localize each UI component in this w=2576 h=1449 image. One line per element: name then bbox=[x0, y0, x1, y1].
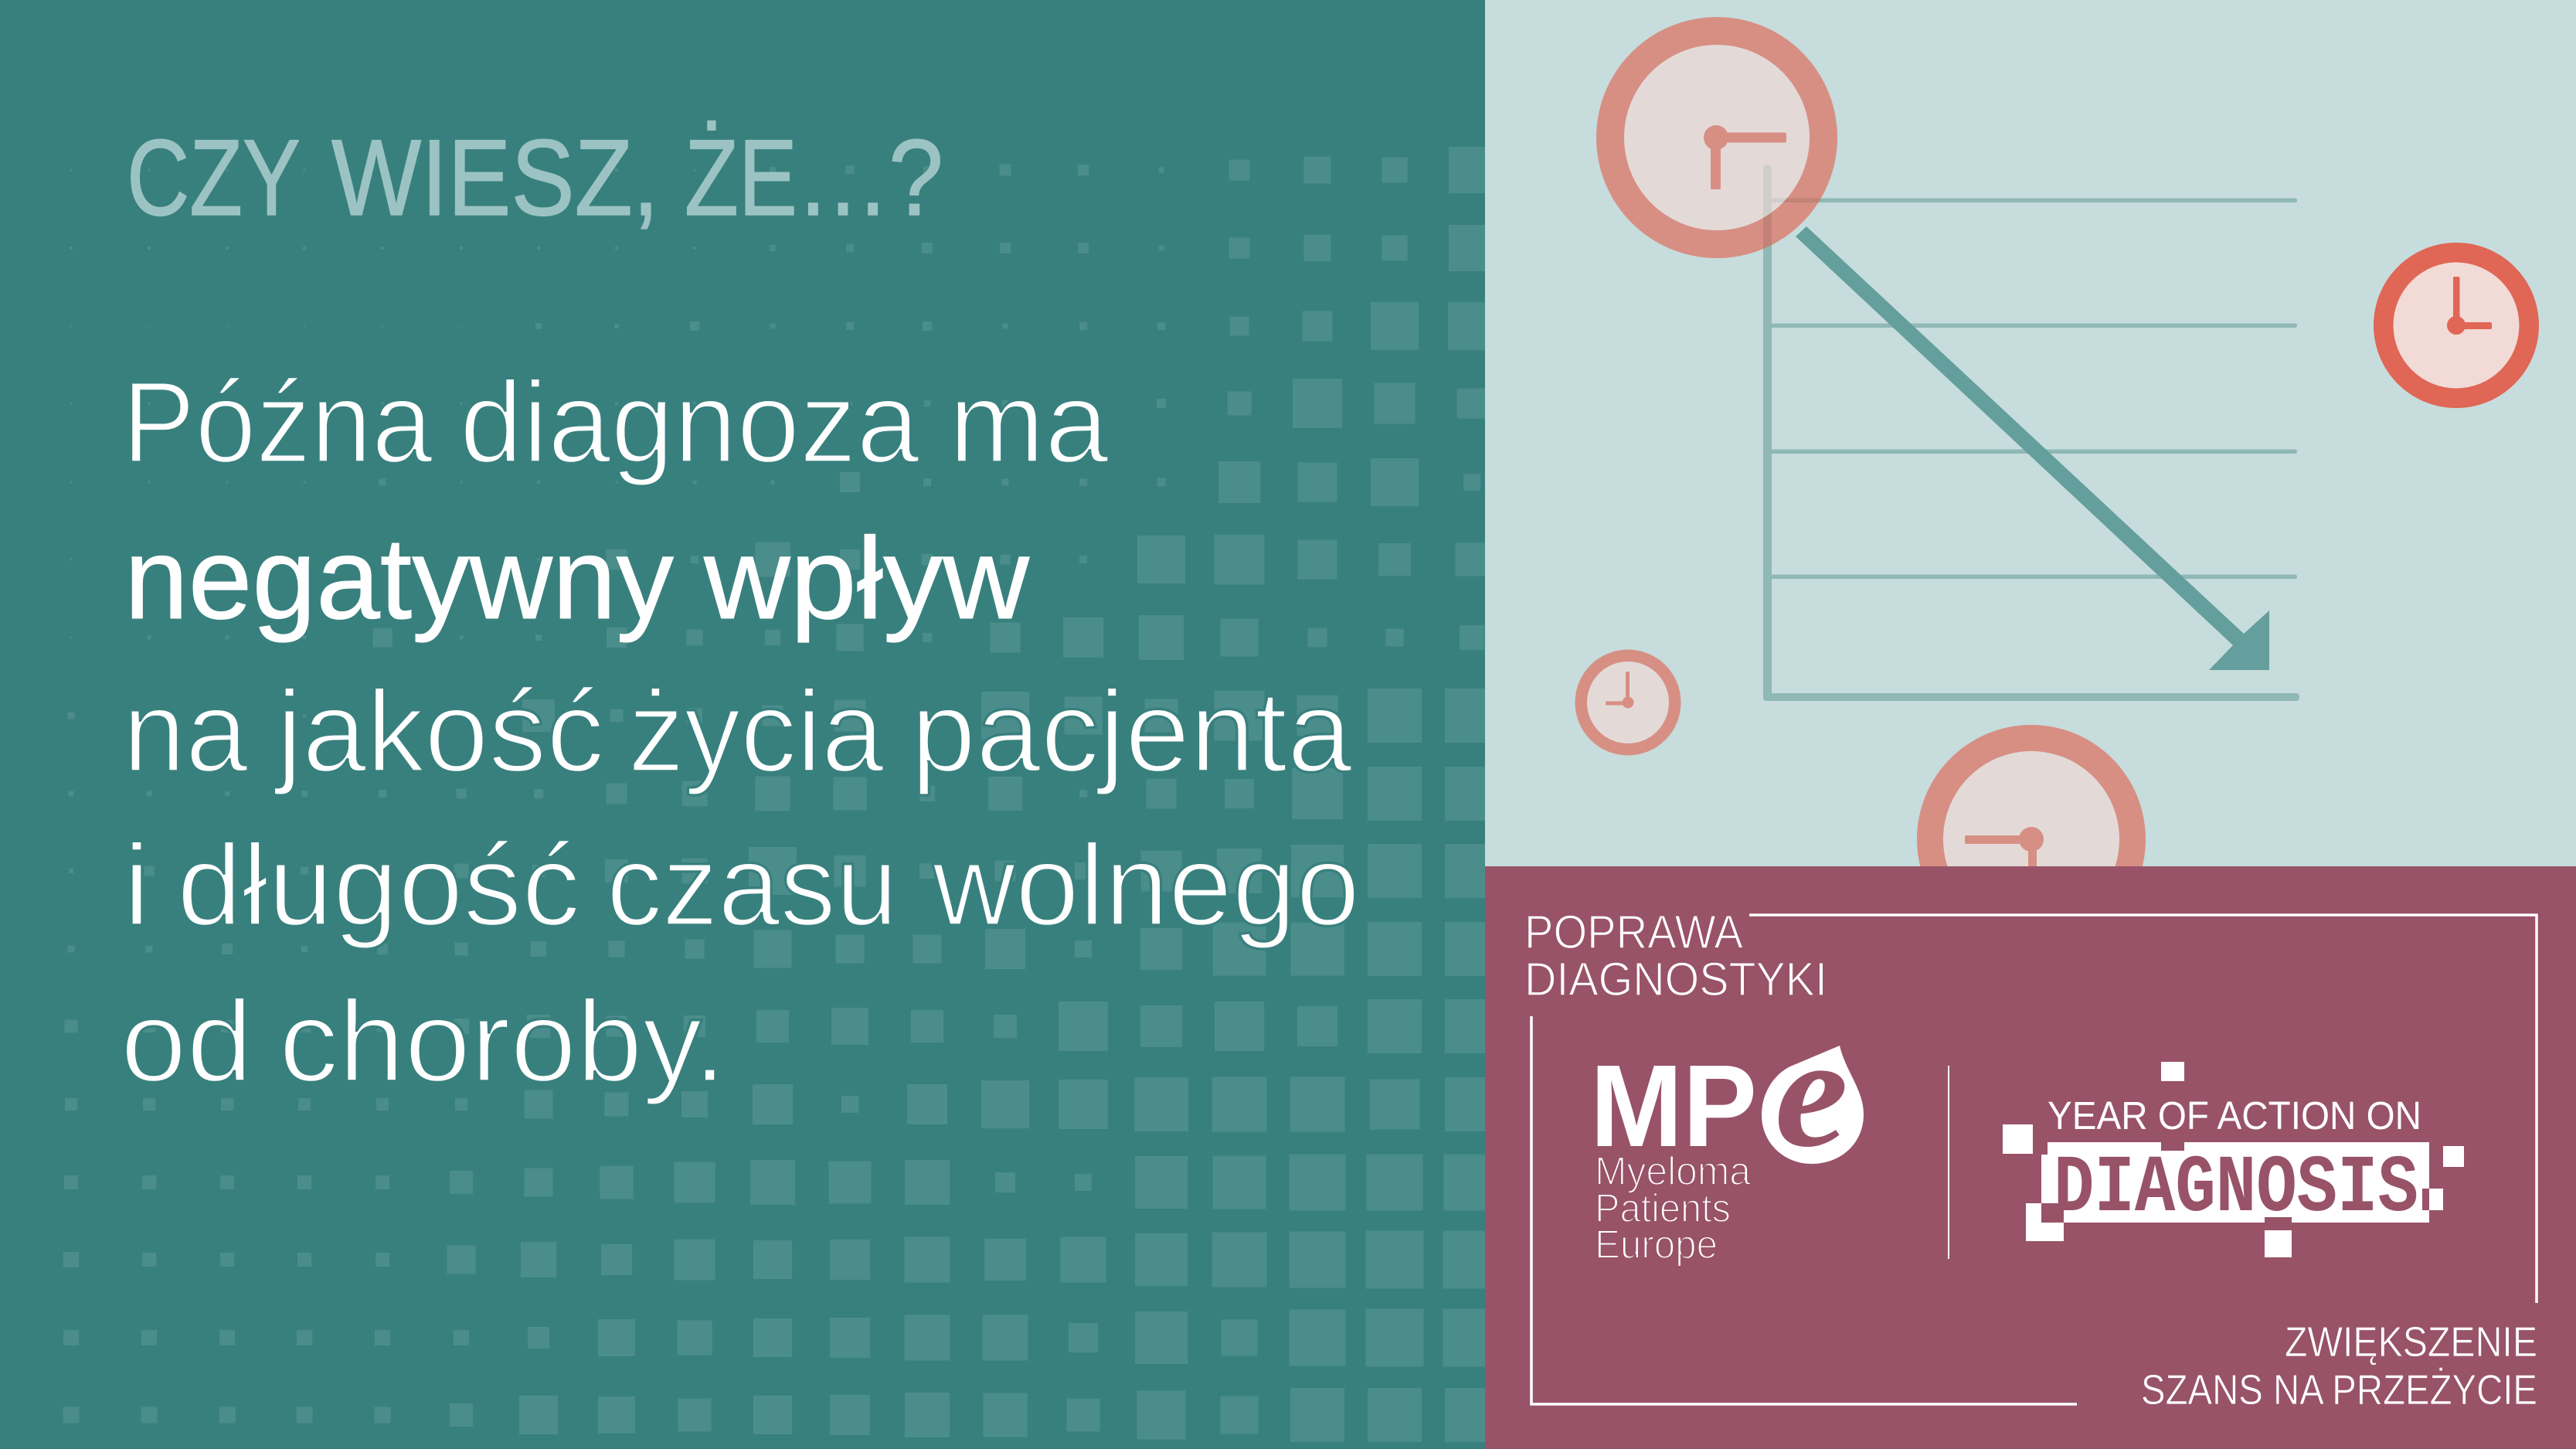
icon: small clock left bbox=[1575, 649, 1681, 756]
logo name: Myeloma bbox=[1595, 1149, 1751, 1194]
line: na jakość życia pacjenta: na bbox=[123, 666, 249, 796]
line: na jakość życia pacjenta: życia bbox=[628, 666, 885, 796]
line: od choroby.: od bbox=[121, 976, 253, 1106]
line: Późna diagnoza ma bbox=[122, 357, 1110, 487]
logo: Myeloma Patients Europe bbox=[1590, 1005, 1864, 1267]
divider bbox=[1948, 1066, 1949, 1259]
line: i długość czasu wolnego: długość bbox=[177, 820, 580, 950]
line: na jakość życia pacjenta: jakość bbox=[274, 666, 604, 796]
icon: drop with letter e: e bbox=[1775, 1005, 1848, 1180]
line: negatywny wpływ (emphasis) bbox=[124, 513, 1030, 643]
label: ZWIĘKSZENIE SZANS NA PRZEŻYCIE: ZWIĘKSZENIE bbox=[2285, 1318, 2537, 1366]
line: na jakość życia pacjenta bbox=[123, 666, 1353, 796]
logo text: YEAR OF ACTION ON: YEAR OF ACTION ON bbox=[2048, 1094, 2421, 1138]
line: i długość czasu wolnego: wolnego bbox=[932, 820, 1360, 950]
label: POPRAWA DIAGNOSTYKI: DIAGNOSTYKI bbox=[1524, 953, 1827, 1005]
arrow: downward trend bbox=[1796, 226, 2269, 670]
line: i długość czasu wolnego: czasu bbox=[607, 820, 898, 950]
icon: large clock top left bbox=[1596, 17, 1837, 258]
line: Późna diagnoza ma: Późna bbox=[122, 357, 433, 487]
icon: clock bottom, clipped by panel bbox=[1917, 725, 2146, 954]
label: POPRAWA DIAGNOSTYKI: POPRAWA bbox=[1524, 906, 1743, 958]
panel: maroon logos panel bbox=[1485, 866, 2576, 1449]
line: i długość czasu wolnego: i bbox=[123, 820, 151, 950]
heading: CZY WIESZ, ŻE...?: WIESZ, bbox=[331, 117, 659, 238]
logo name: Europe bbox=[1595, 1223, 1718, 1267]
chart: declining line chart axes and grid bbox=[1763, 165, 2299, 701]
logo box with notches bbox=[2041, 1142, 2429, 1223]
panel: light chart background bbox=[1485, 0, 2576, 867]
logo word: DIAGNOSIS: DIAGNOSIS bbox=[2054, 1143, 2418, 1235]
line: na jakość życia pacjenta: pacjenta bbox=[911, 666, 1353, 796]
icon: clock right bbox=[2374, 243, 2539, 408]
heading: CZY WIESZ, ŻE...? bbox=[127, 117, 943, 238]
label: ZWIĘKSZENIE SZANS NA PRZEŻYCIE bbox=[2141, 1318, 2537, 1413]
logo square inverted parts bbox=[2041, 1189, 2429, 1223]
background pattern: fading squares bbox=[71, 170, 1472, 1415]
heading: CZY WIESZ, ŻE...?: ? bbox=[889, 117, 943, 238]
logo name bbox=[1595, 1149, 1751, 1267]
logo name: Patients bbox=[1595, 1186, 1731, 1231]
frame: white open border bbox=[1531, 915, 2537, 1404]
label: POPRAWA DIAGNOSTYKI bbox=[1524, 906, 1827, 1005]
logo letters: MP: MP bbox=[1590, 1040, 1757, 1171]
line: od choroby.: choroby. bbox=[279, 976, 726, 1106]
logo: Year of Action on Diagnosis bbox=[2003, 1062, 2464, 1257]
heading: CZY WIESZ, ŻE...?: CZY bbox=[127, 117, 301, 238]
heading: CZY WIESZ, ŻE...?: … bbox=[796, 117, 890, 238]
line: Późna diagnoza ma: diagnoza bbox=[460, 357, 920, 487]
logo squares bbox=[2003, 1062, 2464, 1257]
text block: main message bbox=[121, 357, 1360, 1106]
icon: drop with letter e bbox=[1762, 1005, 1864, 1180]
heading: CZY WIESZ, ŻE...?: ŻE bbox=[685, 117, 797, 238]
line: Późna diagnoza ma: ma bbox=[949, 357, 1110, 487]
panel: teal background bbox=[0, 0, 1487, 1449]
line: negatywny wpływ (emphasis): negatywny bbox=[124, 513, 674, 643]
line: negatywny wpływ (emphasis): wpływ bbox=[703, 513, 1030, 643]
line: i długość czasu wolnego bbox=[123, 820, 1360, 950]
